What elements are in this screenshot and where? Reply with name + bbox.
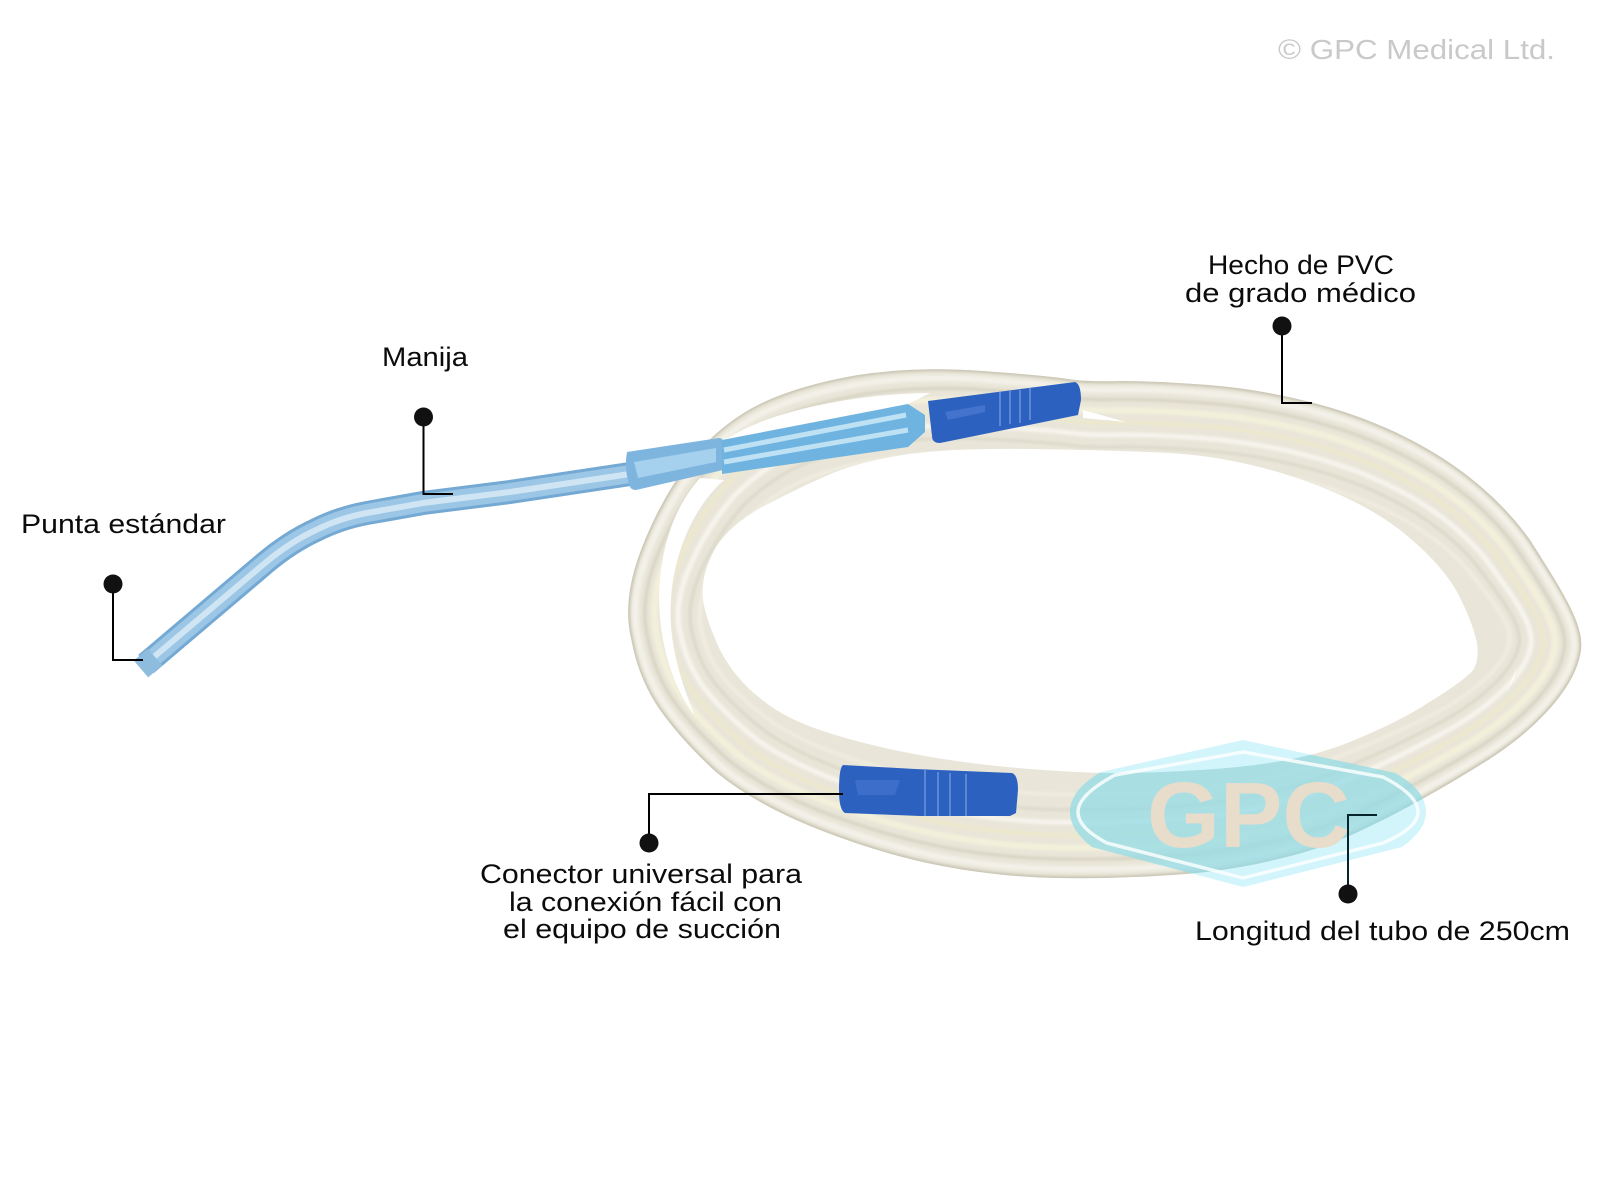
GPC watermark [1070, 740, 1426, 887]
coiled PVC tubing [628, 369, 1582, 878]
callout: Conector universal [480, 794, 843, 944]
product image: suction tube coil, handle and connectors [141, 350, 1600, 900]
teal tint of watermark on tube [1070, 754, 1423, 874]
label: Punta estándar [21, 509, 226, 539]
leader [1282, 326, 1312, 403]
copyright notice: © GPC Medical Ltd. [1278, 34, 1555, 65]
callout: Punta estándar [21, 509, 226, 660]
leader [113, 583, 143, 660]
label: Conector universal para [480, 859, 803, 889]
dot [1272, 316, 1292, 336]
blue aspirator tip tube [141, 474, 630, 669]
callout: Hecho de PVC: de grado médico [1185, 278, 1416, 308]
callout: Conector universal: el equipo de succión [503, 914, 781, 944]
label: Hecho de PVC [1208, 250, 1394, 280]
white gaps between tube loops [659, 393, 1517, 716]
dot [640, 834, 658, 852]
dot [414, 408, 433, 426]
leader [424, 417, 453, 494]
ribbed handle [722, 404, 925, 474]
callout: Manija [382, 342, 469, 494]
watermark letters: GPC [1147, 763, 1350, 867]
dot [1338, 884, 1358, 904]
blue connector top [928, 382, 1081, 443]
handle collar [626, 438, 725, 490]
dot [104, 574, 122, 594]
label: Longitud del tubo de 250cm [1195, 916, 1570, 946]
callout: Hecho de PVC [1185, 250, 1416, 403]
watermark badge [1070, 740, 1426, 887]
blue connector bottom [839, 765, 1018, 816]
callout: Conector universal: la conexión fácil con [509, 887, 782, 917]
label: Manija [382, 342, 469, 372]
leader [1348, 815, 1377, 893]
watermark ring [1078, 752, 1418, 878]
leader [649, 794, 843, 843]
callout: Longitud del tubo [1195, 815, 1570, 946]
